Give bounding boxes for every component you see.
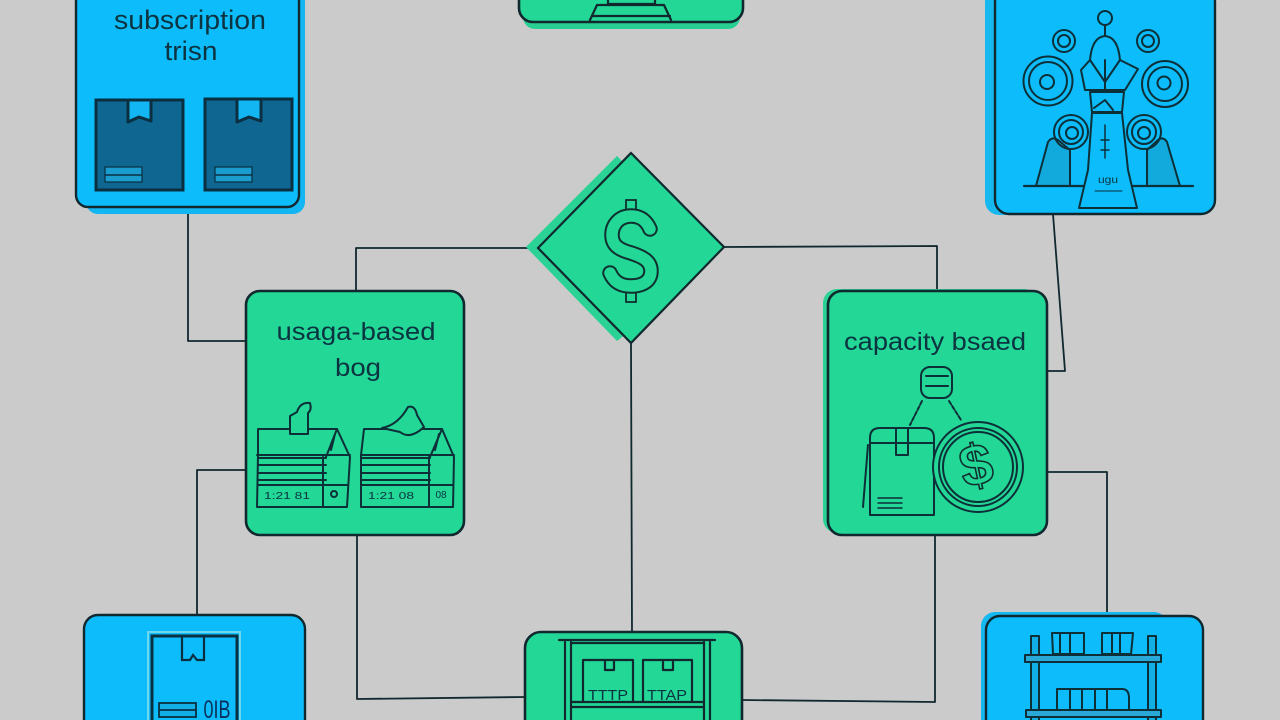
heading: subscription bbox=[114, 5, 266, 66]
icon: shelf with boxes: TTTP bbox=[588, 687, 628, 704]
panel: usage-based bbox=[246, 291, 464, 535]
icon: stacked crates: 1:21 08 bbox=[368, 491, 415, 502]
connector lines bbox=[188, 208, 1107, 702]
panel: capacity based bbox=[823, 289, 1047, 535]
diamond: pricing centre bbox=[526, 153, 724, 343]
heading: usage-based: usaga-based bbox=[276, 318, 436, 346]
icon: pedestal base bbox=[590, 0, 671, 20]
icon: two boxes bbox=[96, 99, 292, 190]
panel: subscription plan bbox=[76, 0, 305, 214]
icon: storage rack bbox=[1025, 633, 1161, 720]
icon: shelf with boxes bbox=[559, 640, 715, 720]
heading: usage-based: bog bbox=[335, 354, 381, 382]
heading: subscription: subscription bbox=[114, 5, 266, 35]
icon: tower with coins: ugu bbox=[1098, 175, 1118, 186]
panel: bottom right shelf bbox=[981, 612, 1203, 720]
icon: coin dollar: $ bbox=[954, 430, 999, 501]
icon: dollar sign bbox=[610, 200, 651, 302]
panel: top right tower bbox=[985, 0, 1215, 215]
heading: capacity based: capacity bsaed bbox=[844, 328, 1026, 356]
icon: stacked crates bbox=[257, 403, 454, 507]
icon: stacked crates: 1:21 81 bbox=[264, 491, 311, 502]
icon: box, coin and tag bbox=[863, 367, 1023, 515]
icon: stacked crates: 08 bbox=[435, 490, 447, 501]
heading: usage-based bbox=[276, 318, 436, 382]
panel: bottom centre shelf bbox=[525, 632, 742, 720]
icon: shelf with boxes: TTAP bbox=[647, 687, 687, 704]
heading: subscription: trisn bbox=[164, 36, 218, 66]
icon: tower with coins bbox=[1024, 11, 1193, 208]
panel: top centre bbox=[519, 0, 743, 29]
icon: single box bbox=[148, 632, 240, 720]
panel: bottom left bbox=[84, 615, 305, 720]
